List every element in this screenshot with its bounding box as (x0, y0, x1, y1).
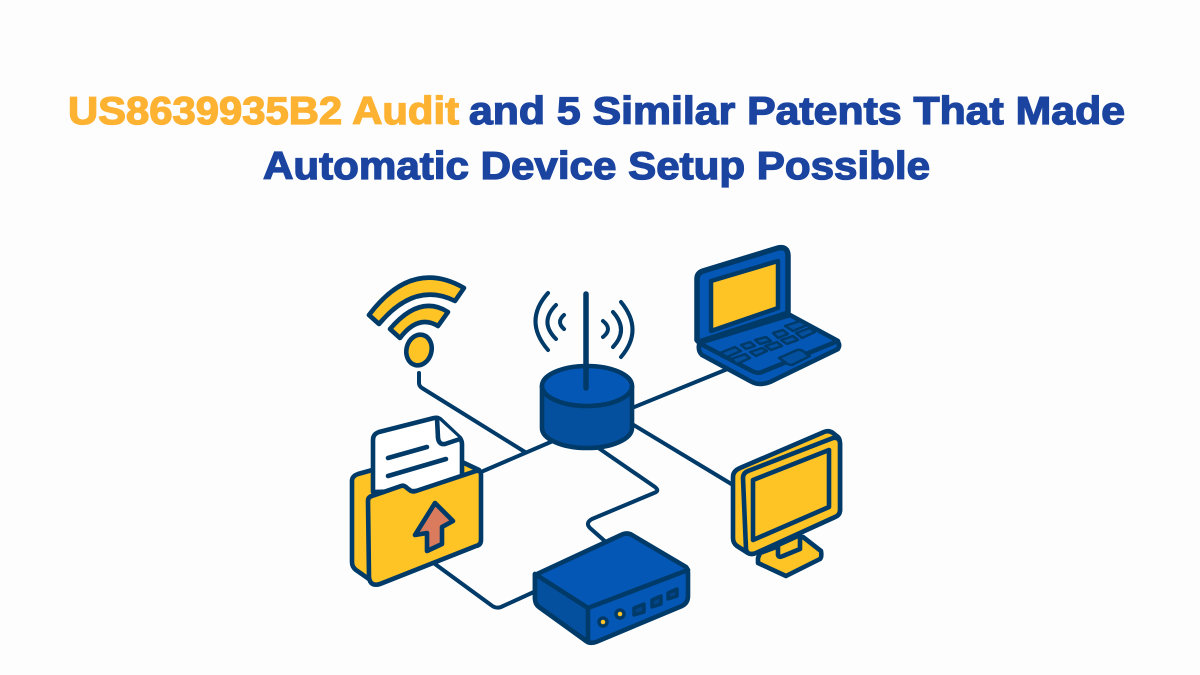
icon: upload arrow (415, 503, 453, 551)
title: US8639935B2 Audit (68, 90, 459, 133)
title (68, 90, 1125, 188)
icon: laptop (697, 248, 839, 384)
icon: monitor (733, 431, 840, 576)
icon: wireless hub (536, 293, 632, 448)
icon: folder (352, 418, 481, 585)
icon: network box (535, 534, 688, 643)
icon: wifi (369, 278, 464, 368)
network illustration (352, 248, 840, 643)
connector lines (419, 368, 733, 608)
title: and 5 Similar Patents That Made (469, 90, 1125, 133)
title: Automatic Device Setup Possible (263, 145, 930, 188)
